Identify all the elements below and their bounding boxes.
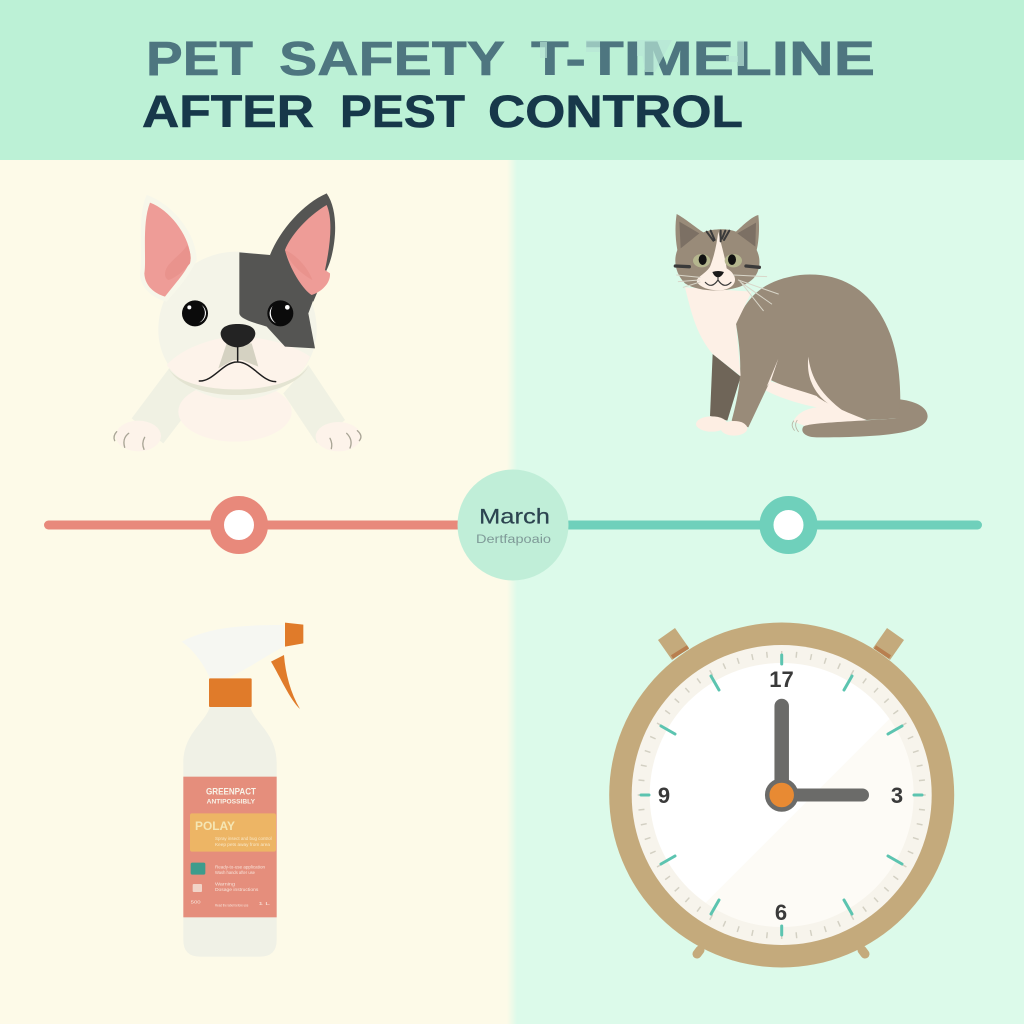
dog left ear [140,195,197,302]
cat thigh highlight [808,357,847,413]
clock feet [697,950,865,954]
label brand text [195,786,256,833]
dog nose [221,324,255,347]
panel: left background [0,160,512,1024]
title line 1: T-TIMELINE [531,33,875,86]
title line 2: PEST [340,86,465,137]
clock dial [632,645,932,945]
dog paws [114,421,361,451]
title line 2: AFTER [142,86,314,137]
cat claws [792,420,799,432]
label small print: Read the label before use [215,904,248,908]
label badge [191,863,205,875]
panel: right background [512,160,1024,1024]
panel: centre blend [507,160,517,1024]
title line 1: SAFETY [279,33,505,86]
cat far leg [710,354,741,421]
title line 1 [146,33,875,86]
cat forehead stripes [675,231,759,267]
clock numerals [658,667,903,925]
label small print: Ready-to-use application [215,864,266,869]
clock rim [609,622,954,968]
dog mouth [199,347,276,382]
label band text: Spray insect and bug control [215,836,272,841]
dog muzzle [167,337,310,393]
panel: header band [0,0,1024,160]
cat nose and mouth [705,271,731,285]
timeline [44,470,982,580]
timeline left segment [44,520,464,530]
spray trigger [271,655,300,709]
clock hour hand [774,706,789,795]
cat chest [685,287,752,376]
dog head [158,252,317,400]
clock face [650,663,914,927]
clock minute hand [782,788,862,802]
label brand text: ANTIPOSSIBLY [207,798,256,805]
label brand text: GREENPACT [206,786,256,796]
dog dark patch [239,252,315,348]
bottle label [183,777,277,917]
badge month: March [479,506,550,528]
label small print: Warning [215,881,236,886]
label brand text: POLAY [195,819,236,833]
title [142,33,875,137]
icon: cat [675,214,928,437]
clock major ticks [641,655,922,935]
title line 2: CONTROL [488,86,743,137]
icon: clock [609,622,954,968]
clock top tabs [658,628,904,660]
label logo [193,884,202,892]
cat inner ears [679,222,756,248]
label small print: 1 L [258,901,271,906]
clock numerals: 17 [769,667,794,692]
bottle body [183,707,277,957]
timeline right segment [560,520,982,530]
title smudges [540,40,744,72]
cat head [675,214,759,290]
label small print [191,864,271,908]
clock numerals: 3 [891,783,903,808]
timeline node: left [217,503,261,547]
clock numerals: 9 [658,783,670,808]
timeline node: right [766,503,810,547]
cat face blaze [697,232,735,290]
clock minor ticks [641,654,923,936]
icon: french bulldog [114,193,361,451]
label band text: Keep pets away from area [215,842,270,847]
badge subtext: Dertfapoaio [476,534,551,546]
timeline centre badge [458,470,568,580]
dog right ear [270,193,335,302]
cat tail [802,399,928,437]
icon: spray bottle [182,623,303,957]
dog snout shading [218,343,258,368]
dog eyes [182,300,293,326]
dog body [132,365,345,443]
title line 2 [142,86,743,137]
dog neck shadow [168,367,308,395]
label small print: Dosage instructions [215,887,258,892]
cat paws [696,416,747,436]
cat leg highlight [767,359,778,387]
label small print: 500 [191,899,201,904]
cat body [732,275,900,427]
bottle cap [209,678,252,707]
cat eyes [693,254,742,267]
label small print: Wash hands after use [215,870,256,875]
cat belly [765,380,867,427]
label yellow band [190,813,276,852]
cat whiskers [677,275,778,311]
spray head [182,625,284,678]
clock hub [767,780,796,810]
clock numerals: 6 [775,900,787,925]
spray nozzle [285,623,303,647]
title line 1: PET [146,33,253,86]
label band text [215,836,272,847]
